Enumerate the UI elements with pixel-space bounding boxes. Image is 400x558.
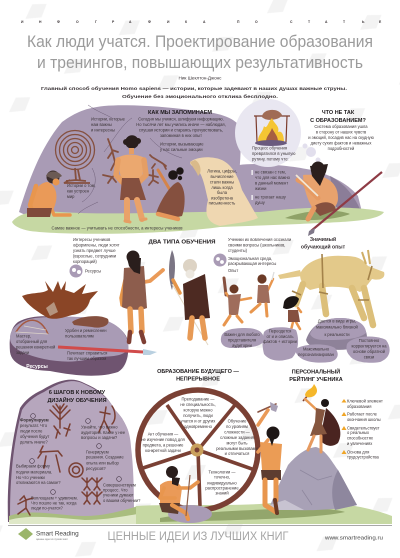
text: teaching: не специальность,	[180, 402, 216, 407]
step 2: вопросы и задачи?	[81, 435, 118, 440]
step 6: Воплощаем + удивляем.	[31, 496, 78, 500]
heading: two types: ДВА ТИПА ОБУЧЕНИЯ	[148, 240, 216, 246]
man with stone hammer	[258, 402, 282, 513]
stone: relevant: аудитории	[232, 343, 252, 348]
text: what is wrong: Система образования ушла	[314, 124, 368, 129]
note: emotional stories: Истории, вызывающие	[160, 142, 204, 146]
thought bubble with fire	[235, 99, 320, 167]
note: bullets about routine: не связан с тем,	[255, 170, 286, 174]
text: teaching: одновременно	[184, 424, 213, 429]
cave background	[8, 380, 132, 522]
step 1: люди после	[20, 428, 43, 434]
text: act of learning: конкретной задачи	[145, 448, 181, 453]
seated man with spear	[296, 162, 382, 236]
subtitle	[41, 85, 347, 99]
stone: personalised: персонализирован	[298, 352, 334, 357]
step 5: ученики думают	[103, 492, 134, 498]
heading: what is wrong	[310, 110, 367, 124]
text: levels: реальными вызовами	[216, 446, 258, 451]
title: Как люди учатся. Проектирование образования	[27, 32, 373, 51]
footer	[8, 525, 392, 543]
text: teaching: Преподавание —	[181, 396, 215, 402]
bullet 2: окончания школы	[347, 417, 381, 422]
text: what is wrong: диету сухих фактов и неважных	[311, 140, 371, 146]
note: interests	[73, 237, 120, 264]
note: emotional stories	[160, 142, 204, 152]
slogan: ЦЕННЫЕ ИДЕИ ИЗ ЛУЧШИХ КНИГ	[108, 529, 289, 543]
stone: relevant: Важен для любого	[224, 332, 260, 337]
plate note: convenient: Удобен и ремесленен	[65, 328, 106, 333]
note: learners not engaged	[228, 237, 291, 253]
text: what is wrong: и эмоций, посадив нас на скудную	[308, 135, 374, 140]
seated man with stick	[159, 466, 212, 523]
red spear	[58, 347, 143, 352]
step 3	[86, 444, 124, 471]
bullet 3: о реальных	[347, 430, 369, 435]
note: important stories: нам важны	[91, 122, 112, 127]
heading: personal rating: РЕЙТИНГ УЧЕНИКА	[289, 375, 343, 383]
stone: personalised	[295, 344, 338, 363]
brand name: Smart Reading	[36, 530, 79, 538]
website: www.smartreading.ru	[324, 536, 383, 542]
step 3: опыта или выбор	[86, 460, 120, 466]
bullet 3: Свидетельствует	[347, 426, 380, 430]
text: technology	[205, 470, 239, 496]
note: important stories: Истории, которые	[91, 116, 126, 122]
step 1: Формулируем	[20, 418, 49, 422]
note: routine	[252, 146, 295, 162]
note: scroll text: была	[217, 190, 228, 195]
note: bullets about routine	[252, 170, 291, 205]
text: how we remember: Сегодня мы учимся, шлифуем информацию.	[138, 116, 224, 122]
bullet 4: Основа для	[347, 450, 369, 454]
panel: future education wheel	[136, 369, 392, 524]
text: teaching: получить, люди	[183, 413, 213, 418]
note: how world works: мир	[67, 194, 75, 199]
ground	[12, 208, 384, 234]
text: act of learning	[141, 432, 185, 453]
labyrinth petroglyph	[56, 130, 94, 183]
text: levels: Обучение	[228, 418, 247, 424]
girl running	[283, 296, 301, 330]
ground right	[136, 502, 392, 524]
bullet 3: способностях	[347, 436, 373, 440]
step 4: откликаются на самое?	[16, 480, 61, 485]
panel: personal student rating	[258, 368, 383, 513]
petroglyphs	[18, 404, 115, 515]
note: bullets about routine: в данный момент	[255, 180, 288, 186]
step 2: аудитории. Какие у нее	[81, 430, 126, 435]
petroglyph figures	[103, 139, 166, 185]
note: important stories: и интересны	[91, 128, 115, 132]
stone: feedback: Постоянно	[359, 338, 380, 343]
stone: facts and stories: от и и описать	[266, 334, 294, 339]
stone: personalised: Максимально	[303, 346, 330, 352]
text: levels: могут быть	[227, 440, 247, 446]
text: teaching: учатся и от других	[181, 418, 215, 424]
ground	[9, 506, 138, 524]
heading: six steps: 6 ШАГОВ К НОВОМУ	[49, 390, 106, 396]
note: scroll text: письменность	[209, 200, 235, 206]
stone: facts and stories: Переодется	[269, 328, 291, 334]
step 5: о вашем обучении?	[103, 498, 141, 503]
bullet 1: Ключевой элемент	[347, 398, 383, 404]
step 3: Генерируем	[86, 450, 109, 454]
text: levels	[216, 418, 258, 456]
step 6: люди по-учатся?	[31, 506, 63, 510]
step 4	[16, 459, 61, 485]
large wheel	[138, 390, 258, 510]
stone: facts and stories: фактов + истории	[263, 339, 297, 344]
subtitle: Обучение без эмоционального отклика бесплодно.	[122, 93, 278, 99]
seated listener	[27, 170, 70, 217]
step 6: Что пошло не так, когда	[31, 500, 77, 506]
note: interests: (взрослые, сотрудники	[73, 254, 116, 258]
note: interests: оформлены, люди хотят	[73, 242, 120, 248]
text: technology: Технологии —	[209, 470, 236, 474]
painting woman	[156, 167, 185, 219]
step 4: Выбираем форму	[16, 464, 51, 468]
text: technology: распространение	[205, 486, 239, 490]
bullet 2	[342, 412, 381, 422]
plate note: how to cope: так лучшим образом	[67, 356, 106, 361]
bullet 3: и увлечениях	[347, 441, 372, 446]
text: teaching: которую можно	[184, 408, 213, 412]
step 4: подачи материала.	[16, 470, 52, 474]
caption: most important: Самое важное — учитывать не способности, а интересы учеников	[52, 226, 182, 230]
panel: how we remember cave scene	[12, 99, 384, 236]
note: routine: Процесс обучения	[252, 146, 287, 150]
step 4: Но что ученики	[16, 475, 45, 480]
author: Ник Шеклтон-Джонс	[179, 76, 222, 80]
plate note: master: отобранный для	[16, 339, 47, 344]
text: how we remember: слушая истории и стараясь прочувствовать,	[139, 128, 223, 132]
rock on the right	[225, 164, 363, 222]
stone: feedback: основе обратной	[353, 349, 385, 354]
note: learners not engaged: Ученики их вовлечения осознали	[228, 237, 291, 242]
text: teaching	[180, 396, 216, 429]
step 2: Узнайте, что важно	[81, 424, 118, 430]
step 1: обучения будут	[20, 434, 49, 439]
text: levels: и отличаться	[225, 451, 249, 456]
standing man from behind	[116, 135, 146, 222]
stone: relevant: представителя	[228, 338, 256, 342]
stone: play	[306, 318, 367, 350]
note: interests: Интересы учеников	[73, 237, 110, 242]
note: bullets about routine: душу	[255, 200, 266, 205]
step 6	[31, 490, 78, 510]
brand name	[36, 530, 79, 541]
note: scroll text: стали важны	[210, 180, 234, 184]
child with bone	[251, 272, 274, 316]
note: how world works: как устроен	[67, 188, 89, 194]
note: interests: корпораций)	[73, 259, 97, 264]
plate note: master: решения конкретной	[16, 344, 55, 350]
note: interests: узнать предмет лучше	[73, 248, 116, 253]
note: bullets about routine: что для нас важно	[255, 175, 291, 180]
straw animal	[278, 250, 384, 325]
animal hide	[22, 281, 98, 319]
plate note: convenient	[65, 328, 106, 338]
parchment scroll	[190, 157, 258, 226]
text: what is wrong: в сторону от наших чувств	[316, 130, 366, 134]
panel: six steps	[8, 380, 141, 524]
text: act of learning: предмета, а решение	[143, 442, 184, 448]
stone: facts and stories	[262, 327, 298, 361]
plate note: master: Мастер,	[16, 334, 31, 338]
note: scroll text: вычисление	[210, 174, 234, 179]
note: emotional environment: Опыт	[228, 268, 238, 273]
header label: ИНФОГРАФИКА ПО СТАТЬЕ	[21, 20, 382, 24]
heading: six steps: ДИЗАЙНУ ОБУЧЕНИЯ	[47, 396, 107, 404]
text: technology: точечно,	[214, 474, 230, 480]
title: и тренингов, повышающих результативность	[37, 53, 363, 72]
heading: future education: ОБРАЗОВАНИЕ БУДУЩЕГО —	[157, 369, 239, 375]
plate note: how to cope	[67, 350, 107, 361]
bullet 2: Работает после	[347, 412, 378, 416]
label: resources: Ресурсы	[85, 268, 101, 274]
note: learners not engaged: студенты)	[228, 248, 248, 253]
note: scroll text: изобретена	[211, 196, 234, 200]
bullet 4: трудоустройства	[347, 454, 379, 460]
heading: meaningful experience: обучающий опыт	[301, 244, 346, 250]
note: bullets about routine: не трогает нашу	[255, 194, 287, 200]
text: levels: по уровням	[226, 424, 248, 429]
bullet 1	[342, 398, 383, 409]
step 1: результат. Что	[20, 423, 48, 428]
stone: feedback: корректируется на	[351, 344, 387, 348]
stone: feedback	[346, 337, 390, 363]
note: routine: превратился в унылую	[252, 151, 295, 156]
step 5: Совершенствуем	[103, 482, 136, 488]
heading: what is wrong: ЧТО НЕ ТАК	[322, 110, 355, 116]
heading: six steps	[47, 390, 107, 404]
plate note: master: задачи	[16, 350, 29, 355]
text: technology: индивидуально	[207, 480, 237, 486]
note: emotional environment: Эмоциональная среда,	[228, 256, 272, 261]
text: what is wrong	[308, 124, 374, 151]
step 1: делать иначе?	[20, 440, 48, 444]
plate note: how to cope: Почитает справиться	[67, 350, 107, 356]
stone: relevant	[221, 328, 264, 348]
note: how world works: Истории о том,	[67, 183, 96, 188]
note: emotional environment	[228, 256, 276, 273]
club	[72, 316, 109, 328]
step 3: решения. Создание	[86, 454, 124, 460]
text: how we remember: Но тысячи лет мы учились иначе — наблюдая,	[136, 122, 226, 127]
note: emotional stories: у нас сильные эмоции	[160, 147, 202, 152]
heading: meaningful experience	[301, 236, 346, 250]
step 2	[81, 419, 126, 440]
child with club	[224, 278, 251, 325]
panel: two types of learning	[10, 236, 384, 376]
cave cracks	[78, 105, 182, 214]
stone: play: Дается в виде игры,	[318, 318, 356, 324]
heading: personal rating	[289, 368, 343, 383]
text: levels: сложности —	[224, 430, 251, 434]
heading: meaningful experience: Значимый	[310, 236, 336, 243]
text: technology: знаний	[215, 490, 229, 496]
bow and arrow	[16, 320, 48, 334]
note: scroll text: лишь когда	[211, 185, 233, 190]
step 1	[20, 414, 49, 444]
subtitle: Главный способ обучения Homo sapiens — истории, которые задевают в наших душах важные струны.	[41, 85, 347, 91]
step 3: ресурсов?	[86, 466, 106, 471]
text: act of learning: не изучение повод для	[141, 437, 185, 442]
note: routine: рутину, потому что:	[252, 156, 289, 162]
note: bullets about routine: жизни	[255, 186, 266, 191]
heading: how we remember: КАК МЫ ЗАПОМИНАЕМ	[148, 110, 212, 116]
standing long-haired man	[121, 250, 163, 342]
text: levels: сложные задания	[220, 435, 254, 440]
note: learners not engaged: своими вопросы (школьников,	[228, 242, 285, 248]
big boulder	[269, 447, 357, 510]
stone: play: максимально близкой	[316, 324, 358, 330]
note: important stories	[91, 116, 126, 132]
plate note: convenient: пользователям	[65, 334, 94, 338]
text: what is wrong: подробностей	[328, 146, 354, 151]
heading: what is wrong: С ОБРАЗОВАНИЕМ?	[310, 118, 367, 124]
note: emotional environment: раскрывающая интересы	[228, 261, 276, 266]
brand name: ценные идеи из лучших книг	[36, 538, 68, 541]
stone: play: к реальности	[324, 332, 350, 337]
heading: future education	[157, 369, 239, 382]
old man with stone spear	[169, 250, 210, 345]
icon: smart reading logo	[18, 528, 33, 540]
note: scroll text: Логика, цифры,	[207, 168, 237, 174]
icon: experience	[214, 254, 226, 266]
woman with torch on boulder	[303, 384, 340, 452]
heading: future education: НЕПРЕРЫВНОЕ	[176, 376, 220, 382]
text: how we remember	[136, 116, 226, 138]
step 5: процесс. Что	[103, 488, 128, 492]
heading: personal rating: ПЕРСОНАЛЬНЫЙ	[292, 368, 340, 376]
icon: resources	[70, 264, 82, 278]
bullet 1: образования	[347, 404, 371, 409]
bullet 4	[342, 450, 379, 460]
panel: properties stones	[221, 318, 390, 363]
note: how world works	[67, 183, 96, 199]
rating bullet list	[342, 398, 383, 460]
label: resources plate: Ресурсы	[26, 364, 48, 370]
text: act of learning: Акт обучения —	[148, 432, 179, 436]
plate of resources	[10, 281, 157, 376]
stone: feedback: связи	[364, 354, 374, 360]
text: how we remember: запоминая в них опыт	[160, 133, 202, 138]
bullet 3	[342, 426, 380, 446]
note: scroll text	[207, 168, 237, 206]
title	[27, 32, 373, 72]
step 5	[103, 477, 141, 503]
plate note: master	[16, 334, 55, 355]
cave wall	[19, 105, 241, 222]
